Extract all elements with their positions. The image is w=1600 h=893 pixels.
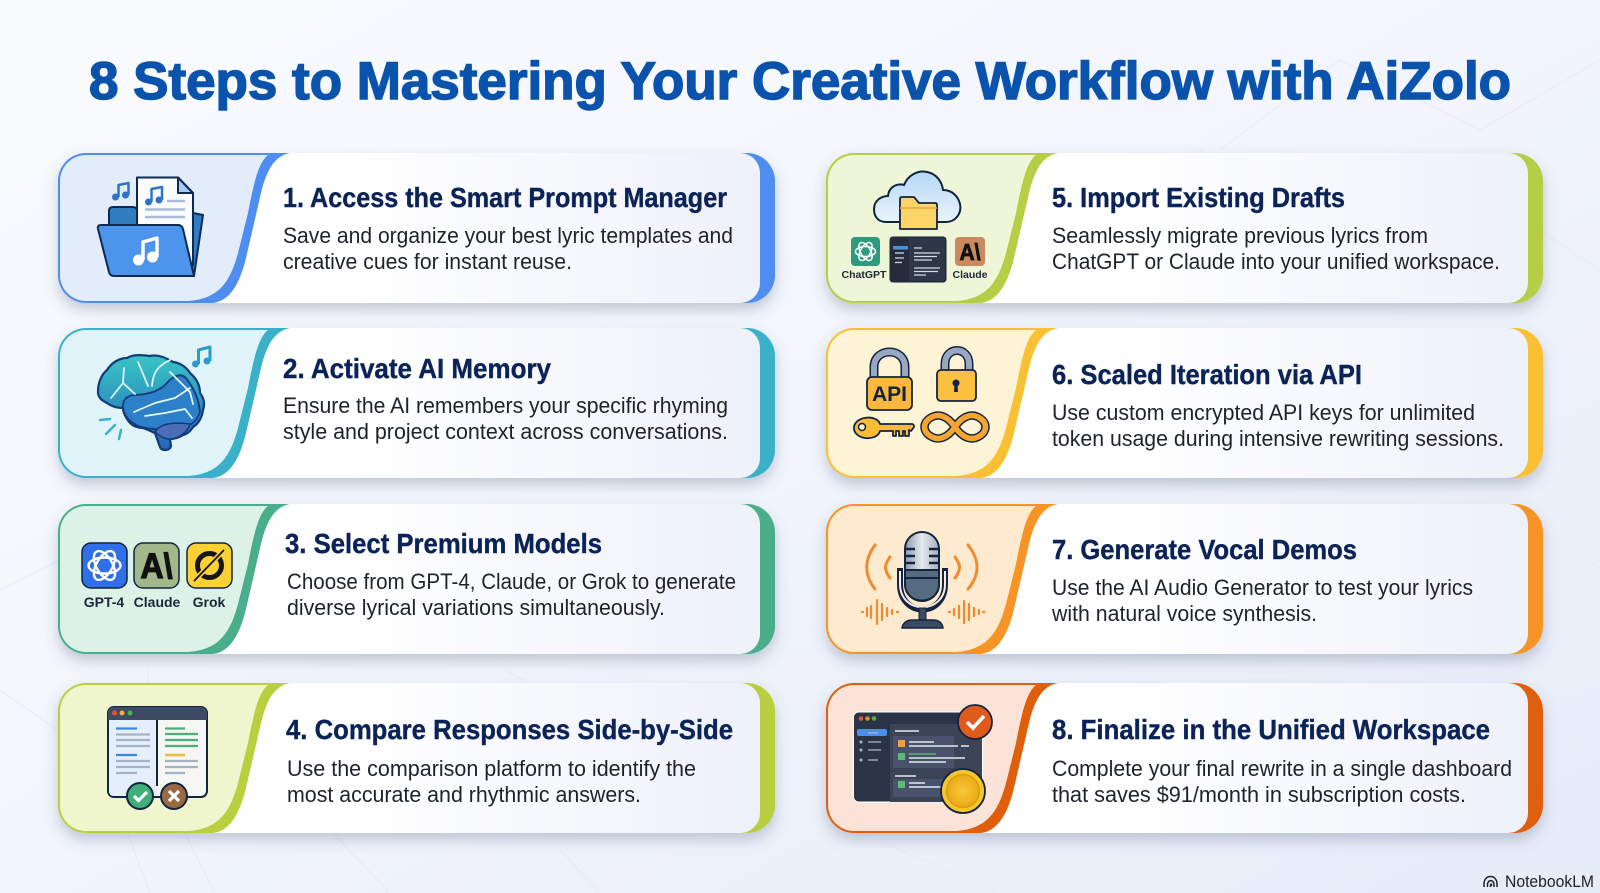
panel: step 8	[826, 683, 1543, 833]
heading: 8. Finalize in the Unified Workspace	[1052, 714, 1490, 745]
icon: music folder	[98, 178, 203, 276]
panel: step 1	[58, 153, 775, 303]
description: ChatGPT or Claude into your unified workspace.	[1052, 249, 1500, 274]
heading: 3. Select Premium Models	[285, 528, 602, 559]
description: with natural voice synthesis.	[1051, 601, 1317, 626]
heading: 6. Scaled Iteration via API	[1052, 359, 1362, 390]
description: diverse lyrical variations simultaneously.	[287, 595, 665, 620]
description	[1052, 400, 1504, 451]
description	[287, 569, 736, 620]
heading: 4. Compare Responses Side-by-Side	[286, 714, 733, 745]
heading: 2. Activate AI Memory	[283, 353, 551, 384]
icon: locks, key and infinity	[854, 350, 986, 438]
description: Complete your final rewrite in a single dashboard	[1052, 756, 1512, 781]
icon: brain	[98, 347, 210, 450]
panel: step 3	[58, 504, 775, 654]
icon: model logos: Grok	[193, 594, 226, 610]
icon: model logos: A\	[140, 547, 173, 586]
heading: 1. Access the Smart Prompt Manager	[283, 182, 727, 213]
heading: 7. Generate Vocal Demos	[1052, 534, 1357, 565]
description: Choose from GPT-4, Claude, or Grok to generate	[287, 569, 736, 594]
description	[287, 756, 696, 807]
icon: model logos: Claude	[134, 594, 181, 610]
icon: cloud import: ChatGPT	[842, 269, 887, 281]
description: creative cues for instant reuse.	[283, 249, 572, 274]
icon: cloud import: Claude	[952, 269, 988, 281]
icon: cloud import	[842, 172, 988, 282]
description: Save and organize your best lyric templates and	[283, 223, 733, 248]
description	[1052, 223, 1500, 274]
icon: microphone with sound waves	[862, 532, 984, 628]
NotebookLM watermark: NotebookLM	[1505, 873, 1594, 891]
icon: dashboard with check and coin	[854, 705, 992, 813]
panel: step 7	[826, 504, 1543, 654]
panel: step 2	[58, 328, 775, 478]
description: token usage during intensive rewriting sessions.	[1052, 426, 1504, 451]
description: that saves $91/month in subscription costs.	[1052, 782, 1466, 807]
panel: step 5	[826, 153, 1543, 303]
description: Ensure the AI remembers your specific rhyming	[283, 393, 728, 418]
description: Seamlessly migrate previous lyrics from	[1052, 223, 1428, 248]
description	[283, 223, 733, 274]
title: 8 Steps to Mastering Your Creative Workflow with AiZolo	[89, 52, 1511, 111]
description: style and project context across conversations.	[283, 419, 728, 444]
description: most accurate and rhythmic answers.	[287, 782, 641, 807]
icon: model logos	[82, 543, 232, 610]
icon: locks, key and infinity: API	[872, 383, 907, 406]
panel: step 6	[826, 328, 1543, 478]
heading: 5. Import Existing Drafts	[1052, 182, 1345, 213]
icon: side-by-side window	[108, 707, 207, 809]
description: Use the comparison platform to identify the	[287, 756, 696, 781]
panel: step 4	[58, 683, 775, 833]
description	[283, 393, 728, 444]
description: Use the AI Audio Generator to test your lyrics	[1052, 575, 1473, 600]
icon: cloud import: A\	[960, 239, 981, 265]
description	[1051, 575, 1473, 626]
description: Use custom encrypted API keys for unlimited	[1052, 400, 1475, 425]
icon: model logos: GPT-4	[84, 594, 124, 610]
description	[1052, 756, 1512, 807]
